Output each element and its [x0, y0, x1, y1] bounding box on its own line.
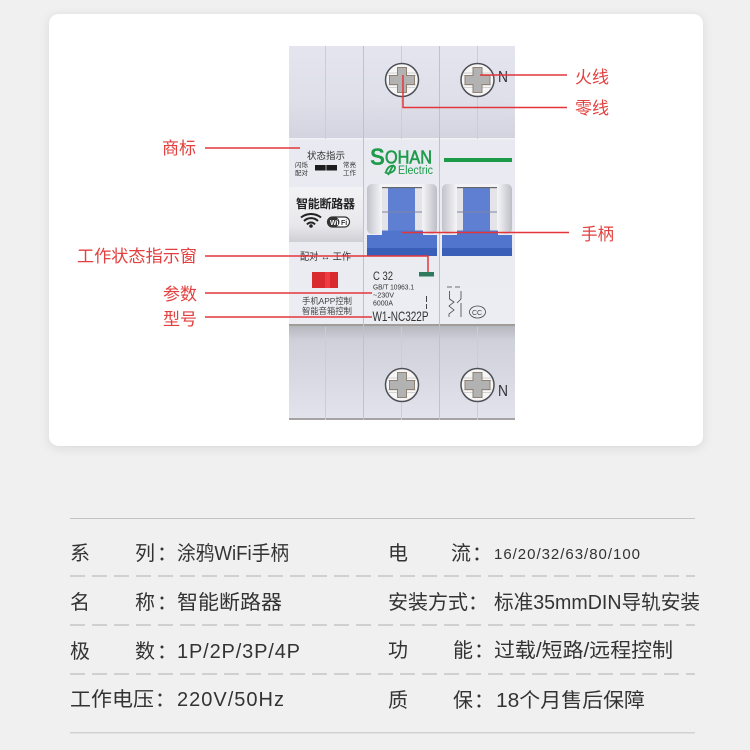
breaker device [289, 46, 515, 420]
spec table [70, 518, 700, 734]
spec: current: 16/20/32/63/80/100 [494, 546, 640, 563]
pairing label and red button: 智能音箱控制 [302, 306, 352, 316]
status indicator label: 配对 [295, 168, 308, 177]
spec: voltage [70, 688, 284, 711]
spec: function: 功 [388, 639, 408, 662]
spec: poles: 数 [135, 640, 155, 663]
status indicator label [295, 150, 356, 177]
spec: poles: 1P/2P/3P/4P [177, 641, 300, 663]
circuit symbol [426, 287, 486, 318]
spec: poles [70, 640, 300, 663]
panel: product card [49, 14, 703, 446]
handles [367, 184, 512, 256]
parameters text [372, 269, 428, 324]
spec: name: 名 [70, 591, 90, 614]
callout: parameters: 参数 [163, 285, 197, 304]
pairing label and red button: 手机APP控制 [302, 296, 352, 306]
spec: function: 能 [453, 639, 473, 662]
N terminal marks: N [498, 383, 508, 400]
status indicator label: 常亮 [343, 160, 356, 169]
parameters text: ~230V [373, 292, 394, 300]
spec: current: 流 [451, 542, 471, 565]
spec: name: 智能断路器 [177, 591, 282, 614]
callout: model: 型号 [163, 310, 197, 329]
spec: name [70, 591, 282, 614]
spec: current: ： [472, 543, 492, 565]
spec: warranty: 质 [388, 689, 408, 712]
spec: series: 系 [70, 542, 90, 565]
status indicator label: 状态指示 [307, 150, 345, 162]
callout: neutral wire: 零线 [575, 99, 609, 118]
spec: poles: 极 [70, 640, 90, 663]
panel: smart breaker label: Fi [341, 220, 347, 227]
spec: poles: ： [157, 641, 177, 663]
brand logo: S [370, 144, 385, 171]
brand logo: Electric [398, 165, 433, 177]
spec: series: ： [157, 543, 177, 565]
spec: voltage: 220V/50Hz [177, 689, 284, 711]
spec: voltage: 工作电压 [70, 688, 154, 711]
spec: current [388, 542, 640, 565]
spec: mounting: 标准35mmDIN导轨安装 [494, 591, 700, 614]
spec: function: ： [474, 640, 494, 662]
callout: trademark: 商标 [162, 139, 196, 158]
parameters text: C 32 [373, 269, 393, 283]
spec: voltage: ： [155, 689, 175, 711]
parameters text: W1-NC322P [372, 308, 428, 324]
spec: series [70, 542, 289, 565]
spec: warranty: 保 [453, 689, 473, 712]
spec: warranty: 18个月售后保障 [496, 689, 645, 712]
panel: smart breaker label: 智能断路器 [296, 196, 355, 211]
green bar [444, 158, 512, 162]
icon: bottom screws [386, 368, 494, 402]
indicator window [419, 272, 434, 276]
parameters text: GB/T 10963.1 [373, 284, 414, 292]
callout: live wire: 火线 [575, 68, 609, 87]
pairing label and red button [300, 250, 352, 316]
pairing label and red button: 配对 ↔ 工作 [300, 250, 351, 263]
panel: smart breaker label [289, 187, 363, 242]
spec: mounting [388, 591, 700, 614]
spec: warranty [388, 689, 645, 712]
spec: name: ： [157, 592, 177, 614]
status indicator label: 工作 [343, 168, 356, 177]
spec: current: 电 [388, 542, 408, 565]
spec: function: 过载/短路/远程控制 [494, 639, 673, 662]
spec: warranty: ： [474, 690, 494, 712]
callout: live wire [480, 68, 609, 87]
spec: series: 涂鸦WiFi手柄 [177, 542, 289, 565]
spec: series: 列 [135, 542, 155, 565]
N terminal marks [498, 69, 508, 400]
callout: trademark [162, 139, 300, 158]
spec: function [388, 639, 673, 662]
status indicator label: 闪烁 [295, 160, 308, 169]
brand logo [370, 144, 433, 177]
spec: mounting: 安装方式： [388, 591, 488, 614]
parameters text: 6000A [373, 300, 393, 308]
N terminal marks: N [498, 69, 508, 86]
brand logo: OHAN [385, 148, 432, 168]
spec: name: 称 [135, 591, 155, 614]
icon: top screws [386, 64, 494, 96]
circuit symbol: CC [472, 310, 482, 317]
panel: smart breaker label: Wi [330, 220, 339, 227]
callout: status window [77, 247, 428, 272]
callout: handle: 手柄 [581, 225, 614, 244]
callout: neutral wire [403, 75, 609, 118]
callout: status window: 工作状态指示窗 [77, 247, 197, 266]
